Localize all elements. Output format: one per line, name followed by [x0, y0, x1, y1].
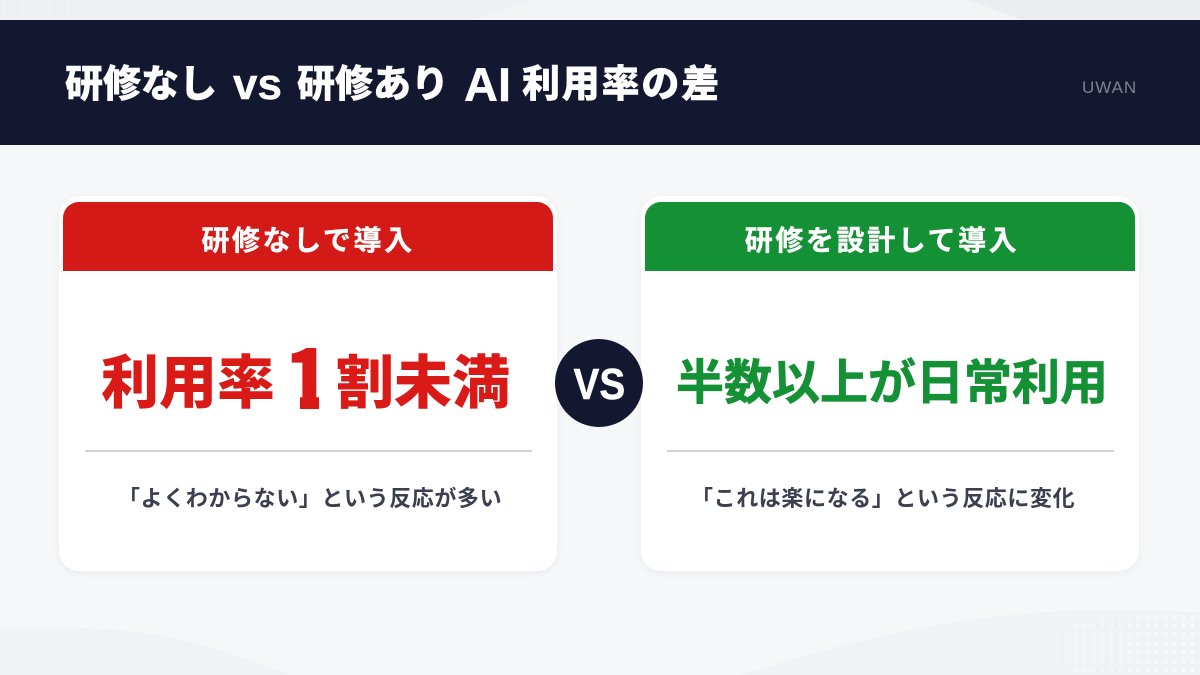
- panel: without training: [59, 196, 557, 571]
- vs badge: VS: [573, 360, 625, 409]
- title: 利用率の差: [522, 64, 721, 106]
- background with wave shapes and halftone dots: [968, 0, 1200, 20]
- key figure: usage under 10 percent: [101, 314, 510, 433]
- title: [65, 58, 721, 111]
- title: vs: [233, 60, 282, 109]
- brand label: UWAN: [1082, 78, 1137, 97]
- panel heading: 研修なしで導入: [201, 225, 415, 256]
- title: 研修なし: [65, 64, 217, 106]
- key figure: majority daily use: 半数以上が日常利用: [676, 357, 1108, 410]
- key figure: usage under 10 percent: 割未満: [336, 351, 510, 416]
- panel heading: 研修を設計して導入: [745, 225, 1019, 256]
- divider: [667, 450, 1114, 452]
- title: 研修あり: [297, 64, 449, 106]
- vs badge: [555, 339, 643, 427]
- reaction text: 「よくわからない」という反応が多い: [118, 486, 502, 511]
- panel header: red: [63, 202, 553, 271]
- panel header: green: [645, 202, 1135, 271]
- reaction text: 「これは楽になる」という反応に変化: [691, 486, 1075, 511]
- key figure: usage under 10 percent: 利用率: [101, 351, 275, 416]
- title: AI: [464, 58, 511, 111]
- panel: with designed training: [641, 196, 1139, 571]
- header bar: [0, 20, 1200, 145]
- divider: [85, 450, 532, 452]
- key figure: usage under 10 percent: 1: [284, 314, 331, 433]
